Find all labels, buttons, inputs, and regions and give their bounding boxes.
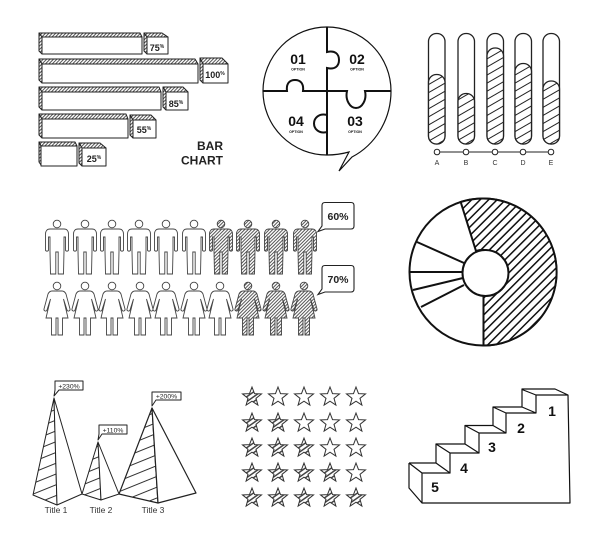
axis labels bbox=[435, 160, 554, 167]
segment dividers bbox=[410, 242, 484, 345]
option 01: 01 bbox=[290, 51, 306, 67]
hatched segment bbox=[461, 199, 557, 346]
pyramid titles: Title 3 bbox=[142, 505, 165, 515]
bar 25% bbox=[39, 142, 106, 166]
star row 5 bbox=[242, 488, 366, 506]
bar 75%: % bbox=[160, 44, 165, 50]
axis labels: B bbox=[464, 160, 469, 167]
capsule E bbox=[543, 34, 560, 144]
capsule D bbox=[515, 34, 532, 144]
stair outline bbox=[409, 389, 570, 503]
callout +200% bbox=[152, 392, 181, 406]
bar 25%: 25 bbox=[87, 154, 97, 164]
bar 55% bbox=[39, 114, 156, 138]
step numbers bbox=[431, 403, 556, 495]
axis with nodes bbox=[434, 149, 554, 155]
pyramid titles: Title 1 bbox=[45, 505, 68, 515]
callout 70%: 70% bbox=[327, 274, 349, 286]
bar 75% bbox=[39, 33, 168, 54]
bar 85%: % bbox=[179, 100, 184, 106]
step numbers: 1 bbox=[548, 403, 556, 419]
bar chart title: CHART bbox=[181, 154, 224, 168]
capsule B bbox=[458, 34, 474, 144]
capsule A bbox=[428, 34, 445, 144]
panel: star rating grid bbox=[242, 387, 366, 506]
callout +110%: +110% bbox=[103, 428, 123, 434]
inner circle bbox=[462, 250, 508, 296]
capsule C bbox=[487, 34, 504, 144]
star row 3 bbox=[242, 438, 366, 456]
pyramid 3 bbox=[119, 408, 196, 503]
option 02: OPTION bbox=[350, 68, 364, 72]
option 04: OPTION bbox=[289, 130, 303, 134]
callout +200%: +200% bbox=[156, 394, 177, 400]
bubble outline bbox=[263, 27, 391, 171]
bar 55%: % bbox=[147, 126, 152, 132]
panel: pyramid chart bbox=[33, 381, 196, 515]
step numbers: 4 bbox=[460, 460, 468, 476]
option 02: 02 bbox=[349, 51, 365, 67]
star row 1 bbox=[242, 387, 366, 405]
axis labels: D bbox=[520, 160, 526, 167]
bar 100%: 100 bbox=[205, 70, 220, 80]
callout +230%: +230% bbox=[58, 384, 80, 390]
axis labels: E bbox=[549, 160, 554, 167]
panel: capsule chart bbox=[428, 34, 560, 167]
outer ring bbox=[410, 198, 556, 346]
bar 55%: 55 bbox=[137, 125, 147, 135]
panel: donut chart bbox=[410, 198, 557, 346]
step numbers: 2 bbox=[517, 420, 525, 436]
pyramid 2 bbox=[82, 442, 119, 500]
bar 100% bbox=[39, 58, 228, 83]
callout 60% bbox=[318, 202, 354, 232]
callout 70% bbox=[318, 266, 354, 294]
men row bbox=[46, 220, 316, 274]
option 03: 03 bbox=[347, 113, 363, 129]
bar chart title: BAR bbox=[197, 139, 223, 153]
bar 85% bbox=[39, 87, 188, 110]
axis labels: C bbox=[492, 160, 498, 167]
panel: bar chart bbox=[39, 33, 228, 168]
panel: staircase bbox=[409, 389, 570, 503]
axis labels: A bbox=[435, 160, 440, 167]
pyramid titles: Title 2 bbox=[90, 505, 113, 515]
bar 75%: 75 bbox=[150, 43, 160, 53]
step numbers: 5 bbox=[431, 479, 439, 495]
step numbers: 3 bbox=[488, 439, 496, 455]
callout +230% bbox=[54, 381, 83, 396]
bar 100%: % bbox=[220, 71, 225, 77]
bar 25%: % bbox=[97, 155, 102, 161]
bar 85%: 85 bbox=[169, 99, 179, 109]
option 04: 04 bbox=[288, 113, 304, 129]
callout 60%: 60% bbox=[327, 211, 349, 223]
option 03: OPTION bbox=[348, 130, 362, 134]
women row bbox=[44, 282, 317, 335]
callout +110% bbox=[98, 425, 127, 440]
panel: puzzle speech bubble bbox=[263, 27, 391, 171]
star row 4 bbox=[242, 463, 366, 481]
pyramid 1 bbox=[33, 398, 82, 505]
star row 2 bbox=[242, 413, 366, 431]
pyramid titles bbox=[45, 505, 165, 515]
option 01: OPTION bbox=[291, 68, 305, 72]
panel: people pictogram bbox=[44, 202, 354, 335]
puzzle dividers bbox=[263, 27, 391, 155]
